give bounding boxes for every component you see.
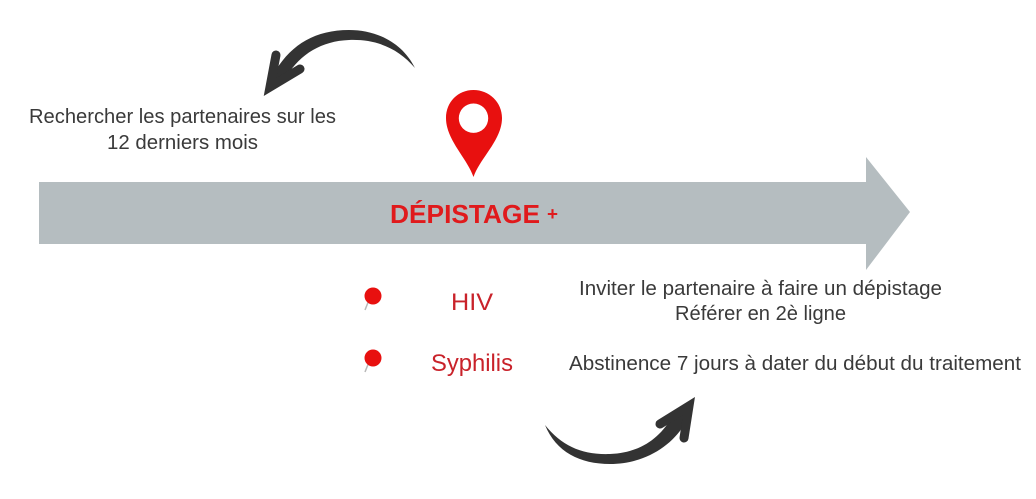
icon: red location pin: [446, 90, 502, 177]
arrow: curved arrow pointing back to the left: [270, 30, 415, 87]
label: HIV: HIV: [451, 289, 493, 316]
text: HIV actions: Référer en 2è ligne: [675, 303, 846, 325]
label: syphilis: Syphilis: [431, 350, 513, 377]
heading: screening positive: +: [547, 204, 558, 224]
text: search for partners: 12 derniers mois: [107, 132, 258, 154]
text: search for partners: Rechercher les partenaires sur les: [29, 106, 336, 128]
text: HIV actions: Inviter le partenaire à faire un dépistage: [579, 278, 942, 300]
heading: screening positive: DÉPISTAGE: [390, 199, 540, 229]
icon: HIV push pin: [364, 288, 382, 310]
text: search for partners: [29, 106, 336, 154]
arrow: main grey timeline arrow: [39, 157, 910, 270]
text: syphilis action: Abstinence 7 jours à dater du début du traitement: [569, 353, 1021, 375]
text: HIV actions: [579, 278, 942, 325]
arrow: curved arrow pointing forward to the right: [545, 406, 689, 464]
icon: syphilis push pin: [364, 350, 382, 372]
